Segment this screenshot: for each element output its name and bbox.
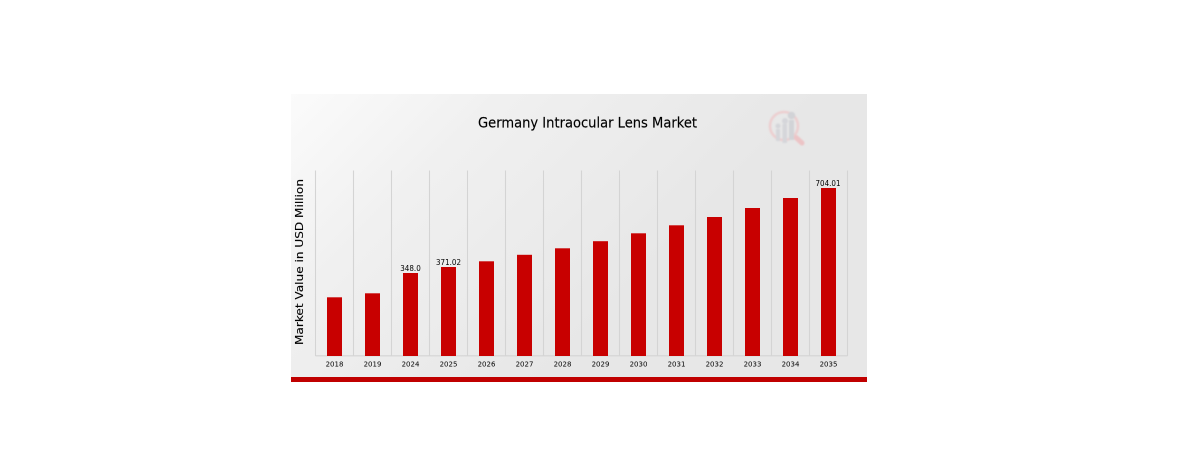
x axis labels: 2031	[668, 360, 685, 368]
bar chart	[327, 188, 836, 356]
x axis labels: 2024	[402, 360, 420, 368]
value labels	[400, 179, 840, 273]
x axis labels: 2032	[706, 360, 723, 368]
x axis labels: 2019	[364, 360, 381, 368]
x axis labels	[326, 360, 837, 368]
title: Germany Intraocular Lens Market	[478, 116, 697, 132]
x axis labels: 2018	[326, 360, 343, 368]
x axis labels: 2033	[744, 360, 761, 368]
value labels: 371.02	[436, 258, 461, 267]
bottom red strip	[291, 377, 867, 382]
x axis labels: 2025	[440, 360, 457, 368]
x axis labels: 2026	[478, 360, 496, 368]
value labels: 348.0	[400, 264, 421, 273]
icon: magnifier logo watermark	[770, 112, 802, 143]
panel: chart background	[291, 94, 867, 382]
x axis labels: 2029	[592, 360, 609, 368]
x axis labels: 2035	[820, 360, 837, 368]
x axis labels: 2028	[554, 360, 571, 368]
x axis labels: 2034	[782, 360, 800, 368]
x axis labels: 2027	[516, 360, 533, 368]
x axis labels: 2030	[630, 360, 647, 368]
value labels: 704.01	[816, 179, 840, 188]
y axis label: Market Value in USD Million	[293, 179, 306, 345]
